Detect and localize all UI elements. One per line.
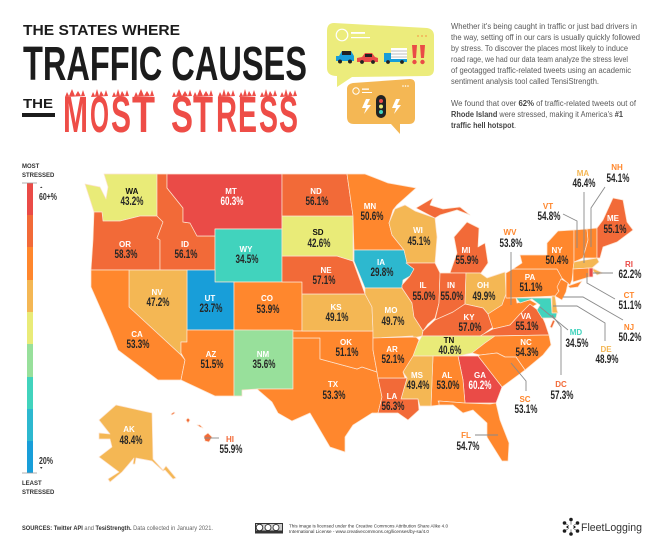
state: UT (187, 270, 234, 330)
label: WY 34.5%: WY (240, 245, 253, 254)
state: TX (257, 338, 382, 452)
label: MT 60.3% (220, 187, 244, 208)
legend: stress colour scale: LEAST (22, 481, 42, 487)
text block: introduction: traffic hell hotspot. (451, 121, 516, 130)
state: SC (478, 353, 525, 387)
label: CO 53.9%: 53.9% (256, 304, 280, 316)
label: UT 23.7%: 23.7% (200, 303, 222, 315)
state: IL (402, 263, 440, 331)
state: VT (574, 229, 588, 262)
state: KY (422, 304, 493, 336)
label: ND 56.1% (306, 187, 328, 208)
state: MN (347, 174, 416, 250)
label: MI 55.9%: MI (462, 246, 470, 255)
label: WA 43.2% (120, 187, 144, 208)
label: ND 56.1%: ND (310, 187, 322, 196)
text block: introduction: the way, setting off in our cars is usually quickly followed (451, 33, 640, 42)
label: DC 57.3%: 57.3% (550, 390, 574, 402)
label: WA 43.2%: 43.2% (120, 196, 144, 208)
label: MI 55.9%: 55.9% (456, 255, 478, 267)
label: MA 46.4%: 46.4% (572, 178, 596, 190)
label: IL 55.0%: IL (419, 281, 427, 290)
state: NY Long Island (568, 281, 582, 288)
label: MN 50.6%: MN (364, 202, 376, 211)
label: VT 54.8%: 54.8% (538, 211, 560, 223)
label: NE 57.1%: NE (320, 266, 332, 275)
label: IA 29.8%: 29.8% (370, 267, 394, 279)
legend: stress colour scale: 60+% (39, 192, 57, 203)
state: KS (302, 294, 373, 331)
label: CO 53.9%: CO (261, 294, 273, 303)
label: MO 49.7%: MO (385, 306, 397, 315)
label: CT 51.1%: CT (624, 291, 634, 300)
state: OR (91, 212, 163, 270)
state: ND (282, 174, 353, 216)
label: WA 43.2%: WA (126, 187, 139, 196)
label: VA 55.1%: 55.1% (516, 321, 538, 333)
label: IA 29.8%: IA (377, 258, 385, 267)
label: ID 56.1% (174, 240, 198, 261)
label: RI 62.2% (618, 260, 642, 281)
footer: license text: International License - www.creativecommons.org/licenses/by-sa/4.0 (289, 529, 429, 535)
state: IN (435, 273, 466, 320)
state: WY (215, 229, 282, 282)
label: TX 53.3%: TX (328, 380, 339, 389)
label: HI 55.9%: 55.9% (220, 444, 242, 456)
label: ND 56.1%: 56.1% (306, 196, 328, 208)
label: SC 53.1%: SC (519, 395, 531, 404)
label: KY 57.0%: KY (463, 313, 475, 322)
label: TN 40.6% (438, 336, 462, 357)
state: AZ (181, 330, 234, 396)
state: HI (171, 412, 212, 442)
title: TRAFFIC CAUSES (23, 38, 307, 91)
label: IN 55.0%: IN (447, 281, 455, 290)
label: LA 56.3% (382, 392, 404, 413)
label: TN 40.6%: TN (444, 336, 455, 345)
label: NV 47.2%: 47.2% (146, 297, 170, 309)
state: CO (234, 282, 302, 331)
label: HI 55.9%: HI (226, 435, 234, 444)
label: CA 53.3%: CA (131, 330, 143, 339)
icon: blue car (336, 51, 354, 64)
label: SC 53.1%: 53.1% (514, 404, 538, 416)
label: DC 57.3%: DC (555, 380, 567, 389)
icon: lightning bolts (362, 99, 401, 114)
label: RI 62.2%: 62.2% (618, 269, 642, 281)
state: MS (401, 356, 433, 406)
label: UT 23.7%: UT (205, 294, 215, 303)
leader lines (204, 187, 623, 438)
label: MS 49.4% (406, 371, 430, 392)
state: OK (293, 331, 377, 372)
label: IL 55.0% (412, 281, 436, 303)
label: TX 53.3%: 53.3% (322, 390, 346, 402)
label: NC 54.3%: NC (520, 338, 532, 347)
label: ID 56.1%: ID (181, 240, 189, 249)
label: NM 35.6%: 35.6% (252, 359, 276, 371)
label: AR 52.1%: AR (386, 345, 398, 354)
label: AZ 51.5% (200, 350, 224, 371)
title: S (111, 86, 131, 143)
label: NE 57.1%: 57.1% (312, 275, 336, 287)
label: NE 57.1% (312, 266, 336, 287)
state: WI (389, 205, 437, 263)
label: NM 35.6%: NM (257, 350, 270, 359)
title: E (238, 86, 257, 143)
label: AK 48.4% (120, 425, 142, 447)
label: NJ 50.2%: NJ (624, 323, 634, 332)
label: ME 55.1%: ME (607, 214, 620, 223)
state: NH (583, 228, 597, 258)
label: NV 47.2% (146, 288, 170, 309)
title: T (132, 86, 155, 143)
label: CO 53.9% (256, 294, 280, 316)
label: VA 55.1%: VA (521, 312, 531, 321)
label: SD 42.6%: SD (312, 228, 324, 237)
label: PA 51.1%: PA (525, 273, 535, 282)
label: ID 56.1%: 56.1% (174, 249, 198, 261)
legend: stress colour scale: MOST (22, 164, 40, 170)
label: MS 49.4%: 49.4% (406, 380, 430, 392)
label: NC 54.3%: 54.3% (516, 347, 538, 359)
label: OK 51.1%: 51.1% (336, 347, 358, 359)
label: MO 49.7%: 49.7% (382, 316, 404, 328)
label: ME 55.1% (604, 214, 626, 236)
label: AK 48.4%: 48.4% (120, 435, 142, 447)
label: NM 35.6% (252, 350, 276, 371)
label: OH 49.9%: 49.9% (472, 291, 496, 303)
state: NV (129, 270, 187, 355)
title: S (171, 86, 193, 143)
label: PA 51.1% (520, 273, 542, 294)
label: FL 54.7% (456, 431, 480, 453)
label: FL 54.7%: FL (461, 431, 471, 440)
label: CT 51.1% (618, 291, 642, 312)
label: MT 60.3%: MT (225, 187, 237, 196)
state: AL (431, 356, 465, 406)
state: VA (480, 304, 549, 336)
icon: red car (357, 53, 378, 64)
label: NH 54.1% (606, 163, 630, 185)
label: TN 40.6%: 40.6% (438, 345, 462, 357)
label: AK 48.4%: AK (123, 425, 135, 434)
label: LA 56.3%: 56.3% (382, 401, 404, 413)
label: GA 60.2% (468, 371, 492, 392)
state: CT (573, 268, 589, 282)
text block: introduction: We found that over 62% of traffic-related tweets out of (451, 99, 637, 108)
label: DE 48.9%: DE (600, 345, 612, 354)
label: DE 48.9% (596, 345, 618, 366)
label: AL 53.0% (436, 371, 460, 392)
label: AL 53.0%: 53.0% (436, 380, 460, 392)
label: MA 46.4% (572, 169, 596, 190)
label: KS 49.1% (326, 303, 348, 324)
label: KY 57.0%: 57.0% (458, 322, 482, 334)
label: WY 34.5% (236, 245, 258, 266)
state: AK (99, 405, 176, 482)
label: NY 50.4% (546, 246, 568, 267)
label: WI 45.1% (408, 226, 430, 248)
state: NC (472, 335, 551, 370)
label: OH 49.9%: OH (477, 281, 489, 290)
footer: license text (289, 524, 448, 535)
label: UT 23.7% (200, 294, 222, 315)
label: AR 52.1% (382, 345, 404, 366)
label: CA 53.3% (126, 330, 150, 351)
legend: stress colour scale: STRESSED (22, 490, 55, 496)
label: AZ 51.5%: AZ (206, 350, 216, 359)
title: R (216, 86, 237, 143)
label: WI 45.1%: 45.1% (408, 236, 430, 248)
label: RI 62.2%: RI (625, 260, 633, 269)
label: VA 55.1% (516, 312, 538, 333)
label: WI 45.1%: WI (413, 226, 423, 235)
label: GA 60.2%: 60.2% (468, 380, 492, 392)
label: MD 34.5%: 34.5% (566, 338, 588, 350)
text block: introduction: by stress. To discover the places most likely to induce (451, 44, 629, 53)
label: MD 34.5% (566, 328, 588, 350)
label: LA 56.3%: LA (387, 392, 398, 401)
text block: introduction: of geotagged traffic-related tweets using an academic (451, 66, 631, 75)
label: AR 52.1%: 52.1% (382, 354, 404, 366)
label: OK 51.1%: OK (340, 338, 352, 347)
title (22, 22, 307, 143)
state: MO (365, 288, 423, 338)
label: IN 55.0% (440, 281, 464, 303)
label: DC 57.3% (550, 380, 574, 402)
icon: truck (384, 48, 407, 64)
state: FL (439, 401, 509, 461)
label: CA 53.3%: 53.3% (126, 339, 150, 351)
text block: introduction: Rhode Island were stressed, making it America's #1 (451, 110, 624, 119)
state: NM (234, 330, 293, 396)
label: MI 55.9% (456, 246, 478, 267)
icon: exclamation marks (412, 45, 425, 64)
footer: license text: This image is licensed under the Creative Commons Attribution Share Alike 4.0 (289, 524, 448, 530)
title: S (259, 86, 278, 143)
state: NJ (555, 279, 568, 300)
label: WY 34.5%: 34.5% (236, 254, 258, 266)
footer: sources: SOURCES: Twitter API and TesiStrength. Data collected in January 2021. (22, 525, 213, 532)
label: VT 54.8%: VT (543, 202, 553, 211)
label: AL 53.0%: AL (442, 371, 452, 380)
title: M (63, 86, 88, 143)
label: KS 49.1%: KS (330, 303, 342, 312)
state: LA (378, 378, 419, 420)
label: IA 29.8% (370, 258, 394, 279)
state: WA (85, 174, 157, 221)
label: MN 50.6%: 50.6% (360, 211, 384, 223)
title: THE (23, 97, 53, 111)
state: NE (282, 256, 365, 294)
title: O (90, 86, 109, 143)
state: VA eastern shore (550, 320, 555, 328)
title: T (193, 86, 213, 143)
title: THE STATES WHERE (23, 22, 180, 39)
label: IN 55.0%: 55.0% (440, 291, 464, 303)
label: OK 51.1% (336, 338, 358, 359)
label: MN 50.6% (360, 202, 384, 223)
text block: introduction: Whether it's being caught in traffic or just bad drivers in (451, 22, 637, 31)
state: IA (354, 250, 414, 288)
label: MD 34.5%: MD (570, 328, 582, 337)
label: GA 60.2%: GA (474, 371, 486, 380)
label: NH 54.1%: 54.1% (606, 173, 630, 185)
logo: FleetLogging: FleetLogging (581, 522, 642, 534)
state: PA (506, 269, 562, 298)
label: MT 60.3%: 60.3% (220, 196, 244, 208)
state: CA (91, 270, 185, 380)
state: ME (597, 198, 633, 258)
legend: stress colour scale (22, 164, 57, 496)
state: SD (282, 216, 353, 261)
illustration: orange speech bubble with traffic light (347, 79, 415, 134)
icon: creative commons badge (255, 523, 283, 534)
state: MD (516, 298, 557, 318)
label: HI 55.9% (220, 435, 242, 456)
state: OH (465, 272, 506, 314)
state: DE (552, 296, 558, 313)
state: AR (373, 337, 419, 378)
state: MA (573, 258, 603, 275)
illustration: yellow speech bubble with cars (327, 23, 434, 87)
state: WV (488, 294, 537, 329)
title: S (279, 86, 298, 143)
label: MA 46.4%: MA (577, 169, 589, 178)
text block: introduction: sentiment analysis tool called TensiStrength. (451, 77, 599, 86)
label: OR 58.3%: OR (119, 240, 131, 249)
state: ID (157, 174, 215, 270)
legend: stress colour scale: 20% (39, 456, 53, 467)
label: TX 53.3% (322, 380, 346, 402)
label: KY 57.0% (458, 313, 482, 334)
label: SD 42.6%: 42.6% (308, 238, 330, 250)
state: RI (589, 268, 593, 277)
label: NV 47.2%: NV (151, 288, 163, 297)
state: NY (513, 230, 574, 285)
label: MO 49.7% (382, 306, 404, 328)
text block: introduction: road rage, we had our data team analyze the stress level (451, 55, 628, 64)
label: SC 53.1% (514, 395, 538, 416)
label: NH 54.1%: NH (611, 163, 623, 172)
label: OR 58.3%: 58.3% (114, 249, 138, 261)
label: NY 50.4%: 50.4% (546, 255, 568, 267)
label: PA 51.1%: 51.1% (520, 282, 542, 294)
label: OH 49.9% (472, 281, 496, 303)
label: WV 53.8% (500, 228, 522, 250)
label: DE 48.9%: 48.9% (596, 354, 618, 366)
label: FL 54.7%: 54.7% (456, 441, 480, 453)
label: WV 53.8%: 53.8% (500, 238, 522, 250)
label: NJ 50.2% (618, 323, 642, 344)
label: SD 42.6% (308, 228, 330, 250)
label: NC 54.3% (516, 338, 538, 359)
legend: stress colour scale: STRESSED (22, 173, 55, 179)
state: TN (413, 336, 495, 356)
label: CT 51.1%: 51.1% (618, 300, 642, 312)
label: NY 50.4%: NY (551, 246, 563, 255)
label: VT 54.8% (538, 202, 560, 223)
text block: introduction (451, 22, 640, 130)
label: OR 58.3% (114, 240, 138, 261)
label: ME 55.1%: 55.1% (604, 224, 626, 236)
label: AZ 51.5%: 51.5% (200, 359, 224, 371)
label: WV 53.8%: WV (504, 228, 517, 237)
state: MI (416, 198, 488, 273)
icon: traffic light (376, 95, 386, 118)
state: GA (458, 356, 502, 403)
map: state shapes (85, 174, 633, 482)
logo: FleetLogging (563, 518, 642, 536)
label: IL 55.0%: 55.0% (412, 291, 436, 303)
label: KS 49.1%: 49.1% (326, 312, 348, 324)
state: MT (167, 174, 282, 236)
label: MS 49.4%: MS (411, 371, 424, 380)
label: NJ 50.2%: 50.2% (618, 332, 642, 344)
